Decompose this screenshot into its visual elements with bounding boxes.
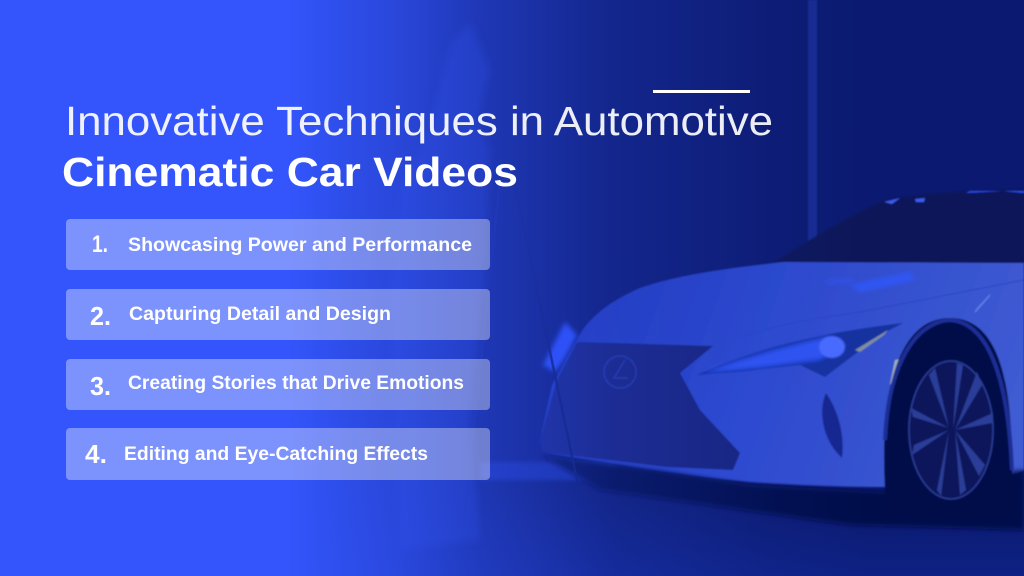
label 3: Creating Stories that Drive Emotions	[128, 372, 464, 394]
label 2: Capturing Detail and Design	[129, 303, 391, 325]
ground	[0, 480, 1024, 576]
left marker light	[543, 322, 577, 372]
number 2: 2.	[90, 301, 111, 331]
label 1: Showcasing Power and Performance	[128, 234, 472, 256]
label 4: Editing and Eye-Catching Effects	[124, 443, 428, 465]
side vent	[822, 393, 843, 458]
panel: item 3	[66, 359, 490, 410]
title	[62, 98, 773, 195]
panel: item 1	[66, 219, 490, 270]
side marker	[890, 358, 906, 384]
number 4: 4.	[85, 439, 107, 469]
number 3: 3.	[90, 371, 111, 401]
floor light band	[480, 462, 615, 480]
photo: cameraman and tripod	[390, 22, 578, 550]
photo: car	[540, 189, 1024, 530]
wheel arch lip	[885, 320, 1012, 470]
headlight	[697, 323, 903, 377]
number 1: 1.	[92, 231, 108, 258]
hood crease	[730, 280, 1024, 340]
accent line	[653, 90, 750, 93]
grille	[540, 342, 740, 470]
shadow under car	[540, 455, 1024, 530]
lexus badge	[604, 356, 636, 388]
windshield and roof	[770, 189, 1024, 264]
wheel	[909, 361, 993, 499]
title line 2: Cinematic Car Videos	[62, 149, 518, 195]
panel: item 4	[66, 428, 490, 480]
title line 1: Innovative Techniques in Automotive	[65, 98, 773, 144]
background pole	[808, 0, 817, 250]
wheel arch and tyre	[884, 318, 1012, 515]
panel: item 2	[66, 289, 490, 340]
hood highlight	[825, 272, 915, 292]
car body	[540, 262, 1024, 487]
